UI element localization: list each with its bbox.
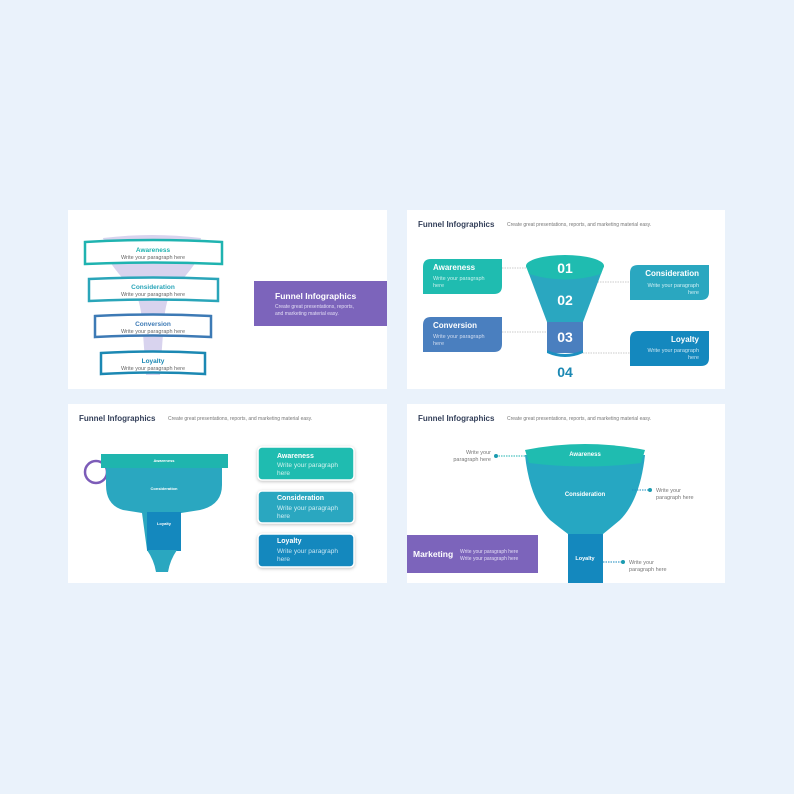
heading: Funnel Infographics [418,220,495,229]
heading [79,414,312,423]
card: Loyalty [630,331,709,366]
icon: ring [85,461,107,483]
funnel: 04 [557,364,573,380]
funnel: Awareness [569,452,601,458]
funnel background [103,235,201,375]
funnel: Consideration [565,492,605,498]
card: Awareness [423,259,502,294]
title box: and marketing material easy. [275,311,339,317]
card: Awareness: Write your paragraph [277,462,338,469]
card: Loyalty: here [277,556,290,563]
card: Awareness: here [433,283,444,289]
card: Consideration [630,265,709,300]
annotations: Write your [466,450,491,456]
box: Awareness [85,240,222,264]
funnel [525,444,645,583]
funnel: Consideration [151,486,178,491]
card: Awareness: here [277,470,290,477]
funnel [101,454,228,572]
heading [418,220,651,229]
card: Consideration: here [688,290,699,296]
annotations: Write your [656,488,681,494]
card: Loyalty: Loyalty [671,335,700,344]
card: Consideration: Consideration [645,269,699,278]
panel: slide 3 [68,404,387,583]
box: Loyalty: Write your paragraph here [121,366,185,372]
title box [254,281,387,326]
card: Loyalty: Write your paragraph [277,548,338,555]
marketing box [407,535,538,573]
card: Awareness [258,447,354,480]
card: Awareness: Write your paragraph [433,276,485,282]
title box: Funnel Infographics [275,291,356,301]
heading: Create great presentations, reports, and marketing material easy. [507,416,651,422]
box: Awareness: Write your paragraph here [121,255,185,261]
box: Conversion [95,314,211,337]
card: Loyalty: here [688,355,699,361]
marketing box: Marketing [413,549,453,559]
funnel: Loyalty [575,556,596,562]
annotations: paragraph here [656,495,694,501]
box: Awareness: Awareness [136,247,170,254]
card: Consideration: here [277,513,290,520]
box: Loyalty: Loyalty [142,358,165,365]
card: Consideration [258,491,354,523]
funnel: 01 [557,260,573,276]
heading: Create great presentations, reports, and marketing material easy. [507,222,651,228]
heading [418,414,651,423]
heading: Funnel Infographics [418,414,495,423]
card: Loyalty [258,534,354,567]
card: Conversion [423,317,502,352]
card: Conversion: here [433,341,444,347]
panel: slide 4 [407,404,725,583]
box: Consideration: Consideration [131,284,175,291]
annotations: paragraph here [629,567,667,573]
annotations: Write your [629,560,654,566]
annotations [453,450,694,573]
card: Loyalty: Write your paragraph [647,348,699,354]
box: Conversion: Conversion [135,321,171,328]
connectors [502,268,630,353]
card: Conversion: Write your paragraph [433,334,485,340]
box: Consideration: Write your paragraph here [121,292,185,298]
marketing box: Write your paragraph here [460,549,518,555]
funnel: Loyalty [157,521,172,526]
funnel: Awareness [153,458,175,463]
card: Awareness: Awareness [277,453,314,460]
funnel: 02 [557,292,573,308]
card: Consideration: Write your paragraph [647,283,699,289]
title box: Create great presentations, reports, [275,304,354,310]
box: Consideration [89,278,218,301]
card: Awareness: Awareness [433,263,476,272]
funnel: 03 [557,329,573,345]
card: Conversion: Conversion [433,321,477,330]
card: Loyalty: Loyalty [277,538,302,545]
heading: Funnel Infographics [79,414,156,423]
panel: slide 2 [407,210,725,389]
box: Loyalty [101,352,205,374]
marketing box: Write your paragraph here [460,556,518,562]
heading: Create great presentations, reports, and marketing material easy. [168,416,312,422]
card: Consideration: Consideration [277,495,324,502]
panel: slide 1 [68,210,387,389]
card: Consideration: Write your paragraph [277,505,338,512]
annotations: paragraph here [453,457,491,463]
funnel [526,255,604,380]
box: Conversion: Write your paragraph here [121,329,185,335]
